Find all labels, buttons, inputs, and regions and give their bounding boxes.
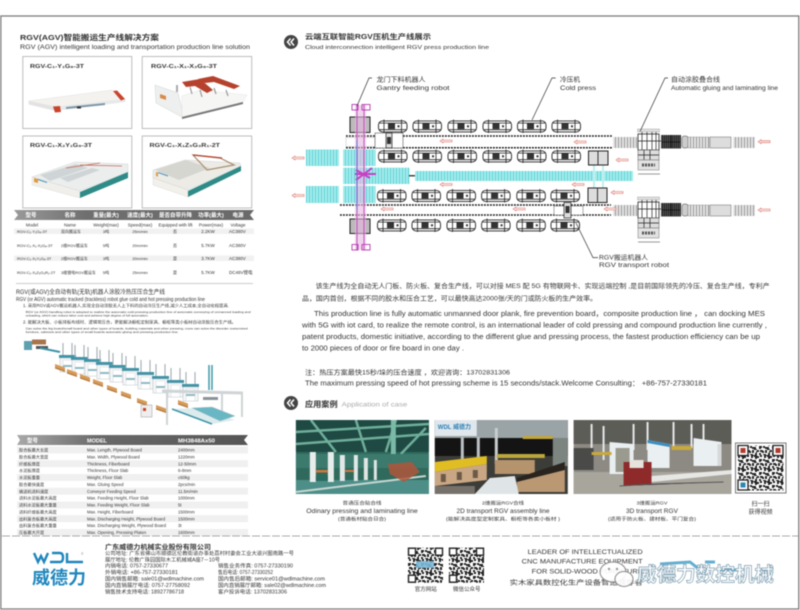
table rows: RGV-C₁-X₁Z₅G₃R₁-2T xyxy=(17,270,56,275)
table rows: 5吨 xyxy=(103,269,109,275)
text block: note: 注：热压方案最快15秒/垛的压合速度 ，欢迎咨询：13702831306 xyxy=(305,368,510,376)
table rows: 20m/min xyxy=(132,243,148,248)
table rows: 出料复合板最大高度 xyxy=(19,515,58,522)
photo: 3D transport xyxy=(572,419,732,494)
text block: features: Can solve the big board/small board and other types of boards, building materials and other pressing, more can solve the disorder customized xyxy=(26,326,248,330)
table rows: 3.7KW xyxy=(201,256,215,261)
text block: description: patent products, domestic initiative, according to the different glue and pressing process, the fastest production efficiency can be up xyxy=(302,334,760,341)
table subheader: Model xyxy=(26,222,38,228)
caption: 2D transport: 2维搬运RGV合线 xyxy=(482,500,525,506)
product card: RGV-C1-X2Y1G8-3T xyxy=(23,136,132,208)
table rows: 3t xyxy=(178,523,182,528)
footer xyxy=(32,542,774,595)
table rows: 20m/min xyxy=(132,256,148,261)
table header xyxy=(14,210,254,220)
panel: RGV solutions left column xyxy=(14,32,254,536)
table subheader: Voltage xyxy=(230,222,246,228)
caption: ordinary line xyxy=(306,500,418,522)
table rows: Max. Width, Plywood Board xyxy=(87,454,140,459)
company contact: 广东威德力机械实业股份有限公司 xyxy=(105,542,211,551)
panel: application cases xyxy=(284,396,786,522)
slogan xyxy=(510,549,643,586)
company contact: 外销电话: +86-757-27330181 xyxy=(105,569,178,576)
photo: ordinary line xyxy=(295,419,430,495)
table rows xyxy=(19,446,198,536)
label: cold press xyxy=(560,74,597,92)
panel: cloud press production line xyxy=(284,32,778,388)
table rows: 3吨 xyxy=(103,255,109,261)
label: RGV transport robot: RGV transport robot xyxy=(599,262,669,269)
text block: description: This production line is fully automatic unmanned door plank, fire prevention board，composite production line ， can docking MES xyxy=(314,311,765,318)
text block: note xyxy=(305,368,707,388)
heading: RGV solution: RGV(AGV)智能搬运生产线解决方案 xyxy=(20,32,160,42)
illustration: press production line xyxy=(24,340,243,425)
table rows: 3吨 xyxy=(103,228,109,234)
QR code: WeChat xyxy=(449,548,484,593)
table rows: 胶合板最大宽度 xyxy=(19,453,49,460)
layout diagram xyxy=(292,74,778,269)
table header: 电源 xyxy=(232,211,244,219)
heading: application of case xyxy=(284,396,408,410)
QR code: website xyxy=(408,548,443,593)
table rows: 是 xyxy=(173,255,177,261)
logo: WDL: ® xyxy=(81,552,84,556)
company contact: 国内直销展厅电话: 0757-27758092 xyxy=(105,582,190,589)
table header: MODEL xyxy=(87,438,108,444)
icon: chevrons xyxy=(284,35,298,49)
table rows: Max. Gluing Speed xyxy=(87,482,124,487)
table rows: Conveyor Feeding Speed xyxy=(87,489,136,494)
text block: features: furniture, cabinets and other types of small boards automatic gluing and pressing production line. xyxy=(26,330,179,334)
label: gantry feeding robot xyxy=(376,74,450,92)
slogan: 实木家具数控化生产设备智造领导者 xyxy=(510,578,643,586)
table rows: Max. Length, Plywood Board xyxy=(87,448,143,452)
caption: scan: 扫一扫 xyxy=(751,500,770,508)
heading: cloud interconnection: Cloud interconnection intelligent RGV press production line xyxy=(305,45,489,51)
table rows: 双向搬运车 xyxy=(61,228,81,234)
table rows: 否 xyxy=(173,229,177,234)
table subheader: Equipped with lift xyxy=(158,222,193,228)
heading: application of case: 应用案例 xyxy=(305,399,338,409)
logo: WDL: 威德力 xyxy=(32,567,86,588)
table rows: RGV-C₁-X₂Y₁G₈-3T xyxy=(17,256,52,261)
table rows: DC48V锂电 xyxy=(229,269,253,276)
slogan: LEADER OF INTELLECTUALIZED xyxy=(528,549,643,556)
table subheader: Name xyxy=(64,222,76,228)
text block: description: with 5G with iot card, to realize the remote control, is an international leader of cold pressing and compound production line currently , xyxy=(301,322,767,330)
table rows: Max. Opening, Pressing Platen xyxy=(87,530,147,535)
company contact: 销售技术支持电话: 18927786718 xyxy=(105,588,184,595)
company contact: 国内售后邮箱: service01@wdlmachine.com xyxy=(218,576,325,583)
heading: robot glue pressing line: RGV (or AGV) automatic tracked (trackless) robot glue cold and hot pressing production line xyxy=(16,297,205,303)
QR code: video xyxy=(736,443,786,493)
table rows: 否 xyxy=(173,243,177,248)
gantry robot xyxy=(352,104,376,250)
table rows: 1220mm xyxy=(178,454,195,459)
icon: wechat xyxy=(600,562,633,586)
table rows: Thickness, Floor Slab xyxy=(87,468,129,473)
lower transfer rail xyxy=(340,202,611,218)
label: cold press: Cold press xyxy=(560,85,597,92)
caption: 3D transport xyxy=(608,500,697,522)
caption: scan: 获得视频 xyxy=(748,508,773,516)
caption: 3D transport: 3D transport RGV xyxy=(626,508,679,515)
heading: robot glue pressing line: RGV(或AGV)全自动有轨(无轨)机器人涂胶冷热压压合生产线 xyxy=(16,288,165,296)
table subheader: Weight(max) xyxy=(93,222,119,228)
table rows: 输送机进料速度 xyxy=(19,488,49,495)
label: automatic gluing line: Automatic gluing and laminating line xyxy=(671,85,778,92)
table rows: 2维RGV搬运车 xyxy=(61,242,88,248)
table rows: 压板最大开度 xyxy=(19,529,45,536)
table rows: 5.7KW xyxy=(201,270,215,275)
table rows: AC380V xyxy=(229,256,246,261)
heading: application of case: Application of case xyxy=(342,402,408,408)
text block: note: The maximum pressing speed of hot pressing scheme is 15 seconds/stack.Welcome Consulting： +86-757-27330181 xyxy=(305,380,707,388)
table rows: 1500mm xyxy=(178,510,195,514)
heading: RGV solution xyxy=(20,32,250,51)
table rows: 5吨 xyxy=(103,242,109,248)
heading: RGV solution: RGV (AGV) intelligent loading and transportation production line solution xyxy=(20,45,250,51)
table rows: 水泥板重量 xyxy=(19,474,40,481)
product card: RGV-C1-X2Y1G8-3T: RGV-C₁-X₂Y₁G₈-3T xyxy=(30,143,93,149)
table rows: 纤维板厚度 xyxy=(19,460,41,467)
caption: 2D transport: (能解决高度型定制家具、橱柜等各类小板材 ) xyxy=(446,516,561,522)
table rows: 出料复合板最大重量 xyxy=(19,522,57,529)
upper transfer rail xyxy=(346,133,613,148)
product card: RGV-C1-X1-X2G8-3T: RGV-C₁-X₁-X₂G₈-3T xyxy=(151,64,218,70)
table rows: ≤60kg xyxy=(178,475,190,480)
product card: RGV-C1-X1-X2G8-3T xyxy=(142,56,252,128)
table rows: 5.7KW xyxy=(201,243,215,248)
company contact: 展厅地址: 伦教广珠园国际木工机械城A座7－10号 xyxy=(105,556,220,563)
table rows: 5t xyxy=(178,503,182,508)
table rows: 6-8mm xyxy=(178,468,192,473)
table header: 功率(最大) xyxy=(198,211,224,219)
text block: description: 该生产线为全自动无人门板、防火板、复合生产线，可以对接 MES 配 5G 有物联网卡、实现远端控制 ,是目前国际领先的冷压、复合生产线，专利产 xyxy=(316,281,770,290)
label: automatic gluing line xyxy=(671,74,778,92)
table header: 速度(最大) xyxy=(127,211,153,219)
company contact: 销售业务传真: 0757-27330190 xyxy=(218,563,293,570)
flow arrows xyxy=(292,139,770,212)
table rows: 2pcs/min xyxy=(178,482,196,487)
table rows: 1600mm xyxy=(178,530,195,535)
text block: features xyxy=(23,302,251,334)
company contact: 售后电话: 0757-27330252 xyxy=(218,569,273,576)
table header: 型号 xyxy=(27,436,39,444)
heading: cloud interconnection xyxy=(284,32,489,51)
heading: robot glue pressing line xyxy=(16,288,205,303)
logo: WDL xyxy=(32,552,86,588)
label: gantry feeding robot: Gantry feeding robot xyxy=(376,85,450,92)
table rows: 进料水泥板最大高度 xyxy=(19,495,58,502)
photo: 2D transport xyxy=(434,419,569,495)
text block: description: to 2000 pieces of door or fire board in one day . xyxy=(302,346,464,352)
text block: features: 2. 能解决大板、小板排板布线时、逻辑常压合，更能解决橱柜定制家具、橱柜等类小板材自动涂胶压合生产线。 xyxy=(23,318,236,326)
table rows: 进料纤维板最大高度 xyxy=(19,508,58,516)
caption: 3D transport: 3维搬运RGV xyxy=(636,500,668,506)
table header: MH3848Ax50 xyxy=(178,438,215,444)
table subheader: Power(max) xyxy=(199,222,224,228)
table rows: 胶合板最大长度 xyxy=(19,446,49,454)
slogan: FOR SOLID-WOOD FURNITURE xyxy=(532,568,643,576)
label: automatic gluing line: 自动涂胶叠合线 xyxy=(671,74,721,84)
table header: 重量(最大) xyxy=(93,211,119,219)
QR code: WeChat: 微信公众号 xyxy=(453,585,481,593)
table rows: 3维锂电RGV搬运车 xyxy=(61,269,96,275)
company contact: 客户投诉电话: 13702831306 xyxy=(218,588,287,595)
label: gantry feeding robot: 龙门下料机器人 xyxy=(376,74,426,84)
table rows: Max. Feeding Height, Floor Slab xyxy=(87,496,149,501)
company contact: 国内直销展厅邮箱: sale02@wdlmachine.com xyxy=(218,582,326,589)
table rows: 胶合最快速度 xyxy=(19,481,45,488)
table header: 名称 xyxy=(64,211,76,219)
caption: ordinary line: 普通压合贴合线 xyxy=(342,500,382,506)
table subheader: Speed(max) xyxy=(128,222,153,228)
table rows: 水泥板厚度 xyxy=(19,467,41,474)
QR code: website: 官方网站 xyxy=(415,585,437,593)
label: cold press: 冷压机 xyxy=(560,74,581,84)
label: RGV transport robot: RGV搬运机器人 xyxy=(599,252,649,262)
caption: 2D transport xyxy=(446,500,561,522)
table rows: 25m/min xyxy=(132,229,148,234)
product card: RGV-C1-X1Z5G3R1-2T: RGV-C₁-X₁Z₅G₃R₁-2T xyxy=(150,143,221,149)
table rows: Max. Discharging Weight, Plywood Board xyxy=(87,523,167,528)
table rows: 25m/min xyxy=(132,270,148,275)
company contact: 内销电话: 0757-27330677 xyxy=(105,563,168,570)
company contact: 国内销售邮箱: sale01@wdlmachine.com xyxy=(105,576,204,583)
table rows: 1000mm xyxy=(178,496,195,501)
text block: features: unloading, which can reduce labor cost and achieve high degree of full automation. xyxy=(26,314,149,318)
photo: 2D transport: WDL 威德力 xyxy=(438,423,471,431)
caption: 3D transport: (适用于防火板、建材板、平门复合) xyxy=(608,516,697,522)
product card: RGV-C1-Y1G8-3T: RGV-C₁-Y₁G₈-3T xyxy=(30,64,85,70)
table rows: 是 xyxy=(173,269,177,275)
caption: ordinary line: (普通板材贴合日合) xyxy=(338,516,387,522)
spec table: MH3848Ax50 xyxy=(17,435,248,536)
leader lines xyxy=(357,78,668,258)
table subheader xyxy=(26,222,246,228)
text block: features: 1. 采用RGV或AGV搬运机器人,实现全自动涂胶无人上下料的自动冷压生产线,减少人工成本,全自动化程度高. xyxy=(23,302,229,309)
table rows xyxy=(17,228,253,276)
text block: features: RGV (or AGV) handling robot is adopted to realize the automatic cold pressing production line of automatic conveying of unmanned loading and xyxy=(26,310,251,314)
table rows: 11.5m/min xyxy=(178,489,198,494)
table rows: Max. Feeding Weight, Floor Slab xyxy=(87,503,150,508)
stacking boxes xyxy=(350,117,608,234)
text block: description: 品，国内首创，根据不同的胶水和压合工艺，可以最快高达2000张/天的门或防火板的生产效率。 xyxy=(302,294,597,302)
heading: cloud interconnection: 云端互联智能RGV压机生产线展示 xyxy=(305,32,431,41)
table header: 是否自带升降 xyxy=(159,211,192,219)
caption: scan xyxy=(748,500,773,516)
label: RGV transport robot xyxy=(599,252,669,269)
table header xyxy=(17,435,248,445)
table rows: 1500mm xyxy=(178,516,195,521)
table rows: RGV-C₁-X₁-X₂G₈-3T xyxy=(17,243,53,248)
company contact xyxy=(105,542,326,595)
slogan: CNC MANUFACTURE EQUIPMENT xyxy=(522,558,643,566)
table rows: 2维RGV搬运车 xyxy=(61,255,88,261)
spec table: RGV models xyxy=(14,210,254,276)
gluing lines xyxy=(613,129,755,242)
watermark: WeChat channel: 威德力数控机械 xyxy=(637,563,774,586)
table rows: 2.2KW xyxy=(201,229,215,234)
company contact: 公司地址: 广东省佛山市顺德区伦教街道办事处荔村村委会工业大道兴图南路一号 xyxy=(105,550,294,557)
product card: RGV-C1-Y1G8-3T xyxy=(23,56,132,128)
table rows: Weight, Floor Slab xyxy=(87,475,123,480)
table header: 型号 xyxy=(25,211,37,219)
product card: RGV-C1-X1Z5G3R1-2T xyxy=(142,136,252,208)
table rows: Max. Height, Fiberboard xyxy=(87,510,134,514)
table rows: 12-50mm xyxy=(178,461,197,466)
table rows: 2400mm xyxy=(178,448,195,452)
text block: description xyxy=(301,281,770,352)
cyan conveyors xyxy=(306,150,633,203)
table rows: Max. Discharging Height, Plywood Board xyxy=(87,516,166,521)
table rows: AC380V xyxy=(229,243,246,248)
caption: 2D transport: 2D transport RGV assembly line xyxy=(456,508,550,515)
caption: ordinary line: Odinary pressing and laminating line xyxy=(306,508,418,515)
table rows: AC380V xyxy=(229,229,246,234)
table rows: Thickness, Fiberboard xyxy=(87,461,130,466)
table rows: 进料水泥板最大重量 xyxy=(19,502,57,509)
cold press rows xyxy=(378,120,580,232)
table rows: RGV-C₁-Y₁G₈-3T xyxy=(17,229,48,234)
